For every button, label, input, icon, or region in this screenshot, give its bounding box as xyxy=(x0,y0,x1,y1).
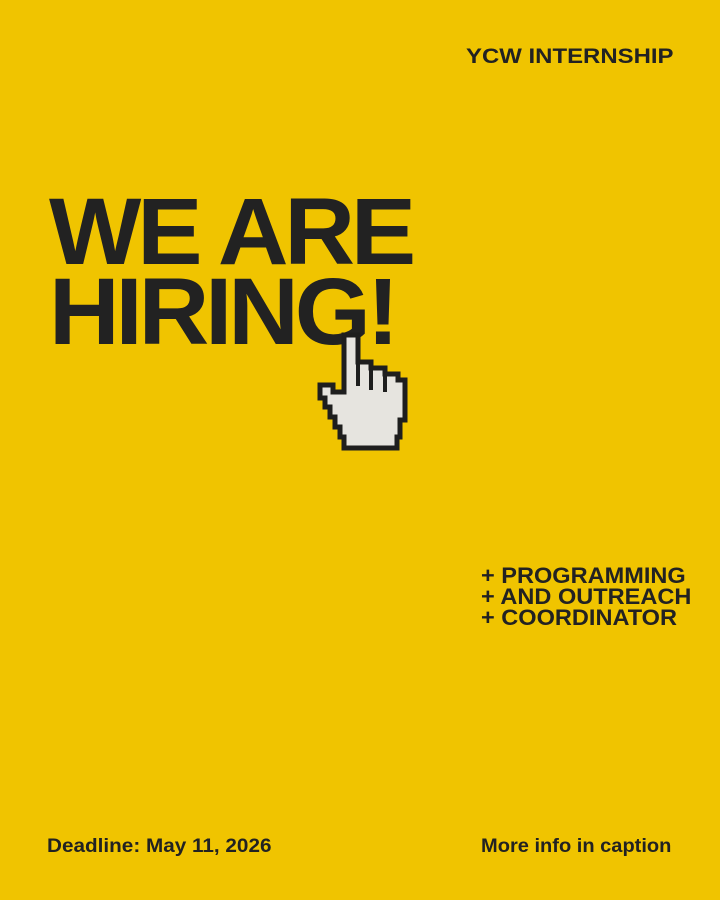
role list xyxy=(481,563,691,630)
deadline: Deadline: May 11, 2026 xyxy=(47,836,271,857)
title xyxy=(49,179,412,365)
role list: + AND OUTREACH xyxy=(481,584,691,609)
title: WE ARE xyxy=(49,179,412,285)
more info: More info in caption xyxy=(481,836,671,857)
title: HIRING! xyxy=(49,259,395,365)
header label: YCW INTERNSHIP xyxy=(466,45,673,68)
role list: + PROGRAMMING xyxy=(481,563,686,588)
role list: + COORDINATOR xyxy=(481,605,677,630)
